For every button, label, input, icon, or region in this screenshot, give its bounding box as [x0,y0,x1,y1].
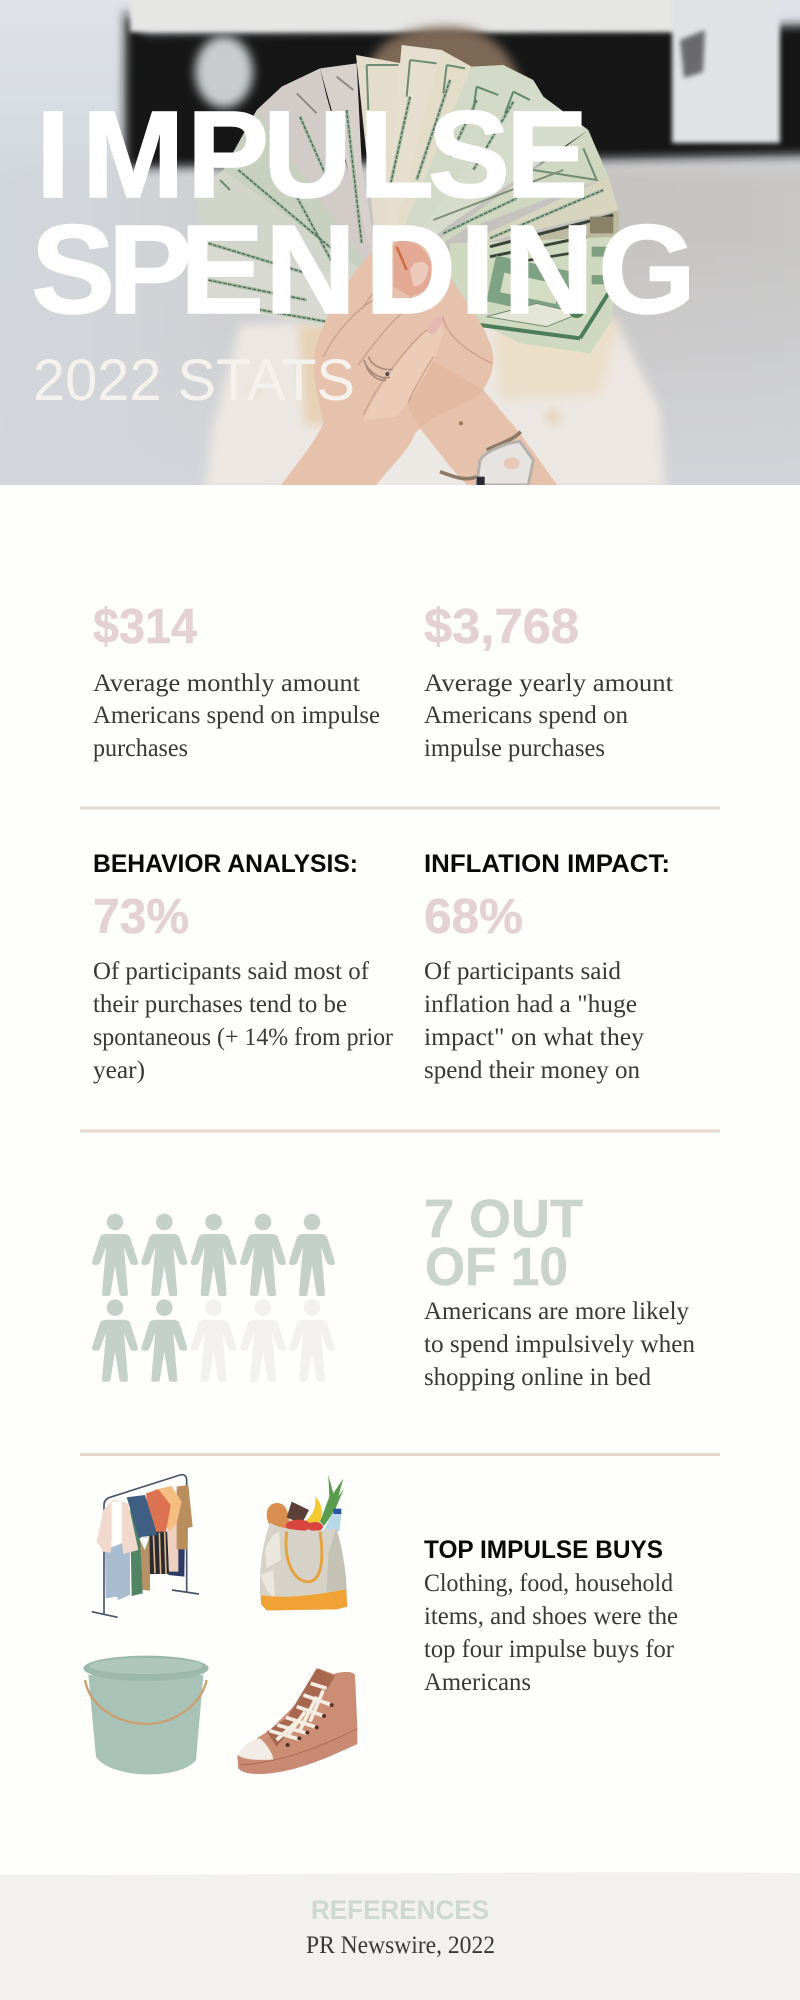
description: top impulse buys: Clothing, food, household [424,1570,673,1597]
bill detail: printed lines [208,80,603,322]
description: top impulse buys: Americans [424,1669,531,1696]
bill detail: pale green strips [208,80,603,322]
title line: SPENDING: SPENDING [31,199,696,340]
description: behavior analysis: spontaneous (+ 14% from prior [93,1024,394,1051]
big number: $314: $314 [93,600,197,654]
description: shopping in bed: to spend impulsively when [424,1331,695,1358]
panel: behavior analysis [93,850,394,1084]
big number: 68%: 68% [424,890,523,944]
description: inflation impact: impact" on what they [424,1024,645,1051]
description: yearly amount: impulse purchases [424,735,605,762]
footer: references [0,1872,800,2000]
panel: yearly amount stat [424,600,673,762]
description: monthly amount: Americans spend on impulse [93,702,380,729]
ring [364,357,393,380]
heading: references: REFERENCES [311,1895,489,1925]
title [31,87,696,340]
description: yearly amount: Americans spend on [424,702,628,729]
big text: 7 out of 10: OF 10 [425,1237,568,1297]
icon: clothing rack [92,1475,199,1617]
description: top impulse buys: top four impulse buys for [424,1636,675,1663]
subtitle: 2022 STATS [33,348,355,413]
description: monthly amount: Average monthly amount [93,670,360,697]
heading: top impulse buys: TOP IMPULSE BUYS [424,1536,663,1564]
photo: blurred room background [0,0,800,520]
description: top impulse buys [424,1570,678,1696]
panel: monthly amount stat [93,600,380,762]
description: yearly amount: Average yearly amount [424,670,673,697]
title line: IMPULSE: IMPULSE [36,87,588,224]
description: inflation impact: Of participants said [424,958,621,985]
description: behavior analysis: their purchases tend to be [93,991,347,1018]
big number: $3,768: $3,768 [424,600,579,654]
description: shopping in bed: shopping online in bed [424,1364,651,1391]
panel: 7 out of 10 stat [424,1189,695,1391]
icon: grocery bag [260,1475,347,1610]
description: monthly amount: purchases [93,735,188,762]
description: behavior analysis: Of participants said most of [93,958,370,985]
big number: 73%: 73% [93,890,189,944]
hero photo: woman fanning dollar bills [0,0,800,520]
description: shopping in bed [424,1298,695,1391]
description: behavior analysis [93,958,394,1084]
icon: sneaker [237,1668,357,1774]
finger creases [323,260,492,415]
heading: behavior analysis: BEHAVIOR ANALYSIS: [93,850,358,878]
description: top impulse buys: items, and shoes were the [424,1603,678,1630]
panel: inflation impact [424,850,670,1084]
description: behavior analysis: year) [93,1057,145,1084]
description: inflation impact: spend their money on [424,1057,640,1084]
photo: shirt and blonde hair [205,318,665,490]
photo: pink fingernails inside the fan [393,241,432,296]
bill detail: borders and dark gaps [220,60,613,338]
photo: fan of dollar bills [195,45,621,353]
description: yearly amount [424,670,673,762]
description: inflation impact: inflation had a "huge [424,991,637,1018]
description: shopping in bed: Americans are more likely [424,1298,689,1325]
pictogram: 7 of 10 people [92,1214,335,1382]
description: monthly amount [93,670,380,762]
panel: top impulse buys [424,1536,678,1696]
photo: hands, ring and wristwatch [280,242,558,487]
description: inflation impact [424,958,645,1084]
big text: 7 out of 10: 7 OUT [424,1189,583,1249]
big text: 7 out of 10 [424,1189,583,1297]
heading: inflation impact: INFLATION IMPACT: [424,850,670,878]
icon: bucket [83,1656,209,1774]
source citation: PR Newswire, 2022 [306,1932,495,1959]
